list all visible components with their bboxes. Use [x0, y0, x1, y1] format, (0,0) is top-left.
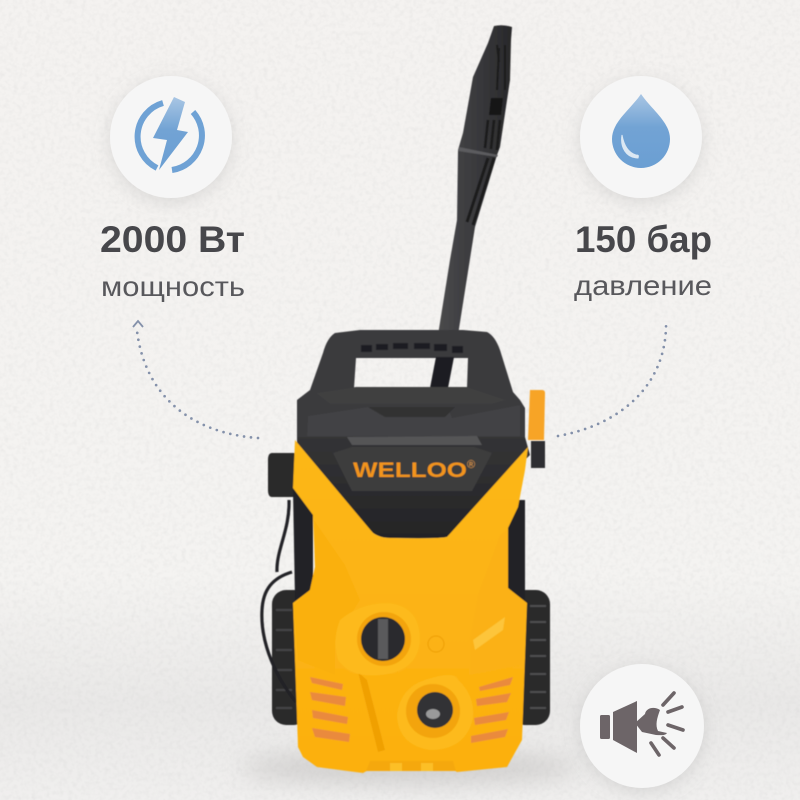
left wheel [272, 590, 308, 725]
rear housing sides [293, 490, 525, 600]
arrow: dotted curve to pressure [558, 320, 666, 436]
lid notch [368, 407, 455, 417]
floor shadow [240, 752, 580, 784]
brand logo: ® [467, 459, 475, 471]
spray wand [438, 25, 512, 335]
body right shading [470, 530, 526, 675]
icon: noise badge [580, 664, 704, 788]
stat: pressure: давление [574, 270, 712, 301]
ridge [358, 672, 385, 752]
light strip [347, 436, 482, 445]
slider clip [531, 441, 545, 468]
stat: pressure: 150 бар [575, 219, 712, 260]
stat: power [100, 219, 245, 302]
power cord [262, 500, 296, 702]
vents [310, 677, 513, 743]
lid panel [307, 405, 520, 436]
logo plate [333, 447, 492, 491]
lid seam [316, 387, 506, 404]
lower port [397, 675, 473, 750]
body panel shading [294, 520, 360, 675]
right wheel [510, 590, 550, 725]
side knob [268, 453, 296, 497]
bottom lip [366, 761, 456, 771]
arrow: dotted curve to power [133, 321, 258, 438]
pressure washer product [262, 25, 550, 773]
side highlight [473, 617, 505, 650]
orange slider [528, 390, 545, 440]
wand behind handle opening [430, 357, 454, 388]
handle grip slots [361, 343, 463, 353]
icon: power badge [110, 76, 232, 198]
bottom tabs [390, 763, 433, 771]
brand logo: WELLOO [353, 459, 467, 482]
yellow body [293, 440, 528, 773]
stat: power: 2000 Вт [100, 219, 245, 260]
handle and lid [297, 330, 525, 445]
icon: water drop badge [580, 76, 702, 198]
stat: pressure [574, 219, 712, 301]
stat: power: мощность [101, 271, 245, 302]
embossed circle [428, 636, 444, 652]
dark front panel [296, 437, 530, 538]
upper port [335, 603, 420, 675]
